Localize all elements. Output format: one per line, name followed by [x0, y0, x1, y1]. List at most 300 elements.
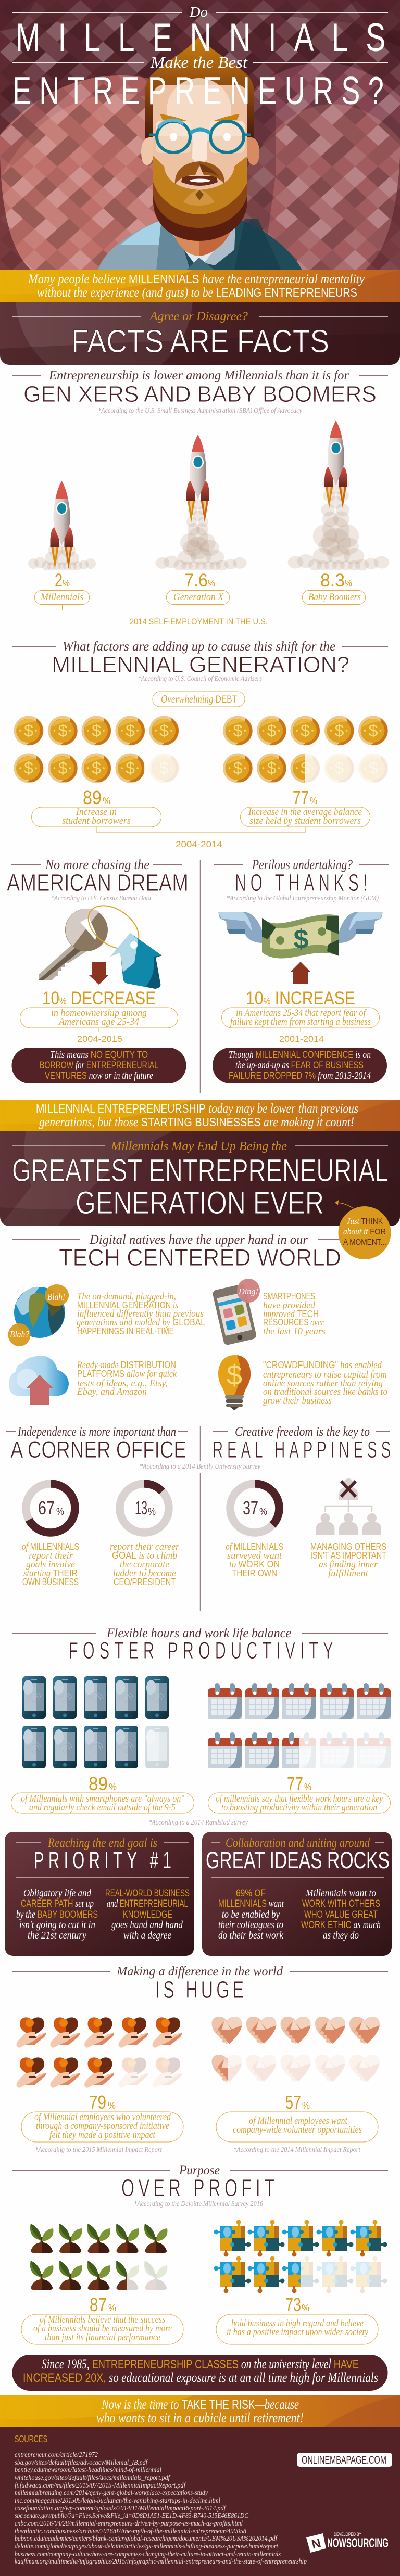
text: life and career path: Obligatory life and: [23, 1888, 92, 1899]
rocket: generation x: %: [208, 578, 215, 589]
stat: 79 percent: felt they made a positive impact: [49, 2129, 156, 2140]
text: global happenings: [77, 1291, 205, 1336]
icon: globe with speech bubbles: [8, 1284, 69, 1346]
coins: student borrowers: $: [126, 759, 135, 777]
coins: student borrowers: $: [58, 759, 68, 777]
heading: No more chasing the: [45, 857, 149, 872]
text: life and career path: by the BABY BOOMERS: [16, 1909, 98, 1920]
heading: Reaching the end goal is: [47, 1836, 157, 1850]
logo: nowsourcing: DEVELOPED BY: [334, 2532, 361, 2537]
text: [110, 1541, 180, 1587]
stat: always on: %: [109, 1782, 117, 1792]
text: global happenings: The on-demand, plugged-in,: [77, 1291, 176, 1302]
panel: greatest entrepreneurial generation: [0, 1131, 400, 1226]
title: [12, 4, 388, 112]
coins: average balance: $: [301, 759, 310, 777]
item: globe: [8, 1284, 205, 1346]
coins: average balance: $: [267, 759, 277, 777]
stat: 37 percent donut: %: [259, 1507, 267, 1517]
heading: millennial generation: [12, 640, 388, 683]
sources list: theatlantic.com/business/archive/2016/07/the-myth-of-the-millennial-entrepreneur/490058: [15, 2528, 246, 2535]
text: distribution platforms: PLATFORMS allow for quick: [77, 1369, 177, 1380]
callout: millennial confidence: [213, 1048, 387, 1083]
icons: plants 87 percent: [30, 2224, 167, 2290]
icon: smartphone with speech bubble: Ding!: [238, 1286, 258, 1296]
sources list: whitehouse.gov/sites/default/files/docs/millennials_report.pdf: [15, 2474, 171, 2482]
heading: FACTS ARE FACTS: [71, 324, 329, 360]
icons: smartphones 89 percent: [22, 1676, 169, 1768]
text: global happenings: generations and molded by GLOBAL: [77, 1317, 205, 1328]
stat: 77 percent: Increase in the average balance: [248, 807, 362, 818]
stat: 87 percent: than just its financial performance: [45, 2332, 160, 2343]
stat: 57 percent: *According to the 2014 Millennial Impact Report: [233, 2146, 361, 2154]
stat: 10 percent increase: 10% INCREASE: [246, 988, 355, 1009]
source: randstad: *According to a 2014 Randstad survey: [148, 1819, 248, 1827]
heading: is huge: [12, 1965, 388, 2003]
heading: gen xers and baby boomers: *According to the U.S. Small Business Administration (SBA) Office of Advocacy: [98, 407, 303, 415]
item: crowdfunding: [218, 1355, 388, 1410]
icons: calendars 77 percent: [208, 1683, 391, 1768]
stat: flexible hours: 77: [287, 1773, 303, 1794]
heading: NO THANKS!: [235, 870, 367, 897]
stat: 79 percent: 79: [89, 2092, 106, 2113]
callout: just think about it: [335, 1200, 391, 1259]
sources list: inc.com/magazine/201505/leigh-buchanan/the-vanishing-startups-in-decline.html: [15, 2497, 220, 2505]
text: crowdfunding: [263, 1360, 388, 1406]
sources list: casefoundation.org/wp-content/uploads/2014/11/MillennialImpactReport-2014.pdf: [15, 2505, 227, 2513]
rocket: millennials: 2: [55, 570, 63, 591]
soul patch: [195, 190, 204, 200]
icon: cloud upload: [9, 1356, 69, 1405]
text: report their: [29, 1550, 73, 1561]
heading: a corner office: A CORNER OFFICE: [10, 1436, 186, 1463]
stat: 10 percent decrease: 2004-2015: [77, 1034, 122, 1044]
stat: always on: and regularly check email outside of the 9-5: [29, 1802, 176, 1813]
coins: student borrowers: $: [24, 721, 33, 740]
stat: 13 percent donut: %: [148, 1507, 156, 1517]
heading: real happiness: Creative freedom is the key to: [235, 1425, 370, 1439]
stat: 67 percent donut: 67: [38, 1497, 55, 1519]
footer: [0, 2427, 400, 2576]
coins: average balance: $: [335, 721, 344, 740]
callout: entrepreneurship classes: [12, 2355, 388, 2391]
heading: Perilous undertaking?: [252, 857, 353, 872]
coins: student borrowers: $: [58, 721, 68, 740]
coins: average balance: $: [369, 759, 378, 777]
icon: winged money: [218, 912, 383, 959]
stat: 89 percent: Increase in: [76, 807, 117, 818]
heading: millennial generation: *According to U.S. Council of Economic Advisers: [138, 675, 262, 683]
stat: 87 percent: of a business should be measured by more: [33, 2323, 172, 2334]
stat: 79 percent: %: [108, 2100, 116, 2111]
stat: 87 percent: [21, 2294, 183, 2344]
intro banner: [0, 270, 400, 302]
stat: 89 percent: student borrowers: [62, 816, 131, 826]
stat: 67 percent donut: [22, 1484, 79, 1587]
panel: facts are facts: [0, 302, 400, 365]
coins: student borrowers: $: [126, 721, 135, 740]
text: report their career: [110, 1541, 180, 1552]
text: smartphones resources: have provided: [263, 1300, 315, 1311]
sources list: entrepreneur.com/article/271972: [15, 2451, 98, 2459]
heading: tech centered world: Digital natives have the upper hand in our: [89, 1233, 308, 1247]
coins: average balance: $: [233, 721, 243, 740]
text: 69 percent: to be enabled by: [222, 1909, 280, 1920]
heading: real happiness: REAL HAPPINESS: [213, 1436, 391, 1463]
rocket: baby boomers: Baby Boomers: [308, 592, 361, 603]
banner: making it count: MILLENNIAL ENTREPRENEURSHIP today may be lower than previous: [36, 1102, 358, 1116]
icon: winged money: $: [294, 924, 309, 954]
text: work with others: WHO VALUE GREAT: [304, 1909, 378, 1920]
stat: 89 percent: %: [103, 796, 110, 806]
stat: 57 percent: company-wide volunteer opportunities: [233, 2124, 362, 2135]
stat: always on: of Millennials with smartphones are "always on": [21, 1793, 185, 1804]
heading: [7, 857, 189, 902]
text: starting THEIR: [23, 1568, 78, 1579]
heading: [214, 857, 389, 902]
panel: no thanks: [213, 857, 389, 1083]
icons: puzzles 73 percent: [214, 2220, 388, 2293]
text: 69 percent: 69% OF: [236, 1888, 266, 1899]
org chart: managing others: [310, 1478, 386, 1579]
heading: gen xers and baby boomers: Entrepreneurship is lower among Millennials than it is for: [48, 368, 349, 382]
text: life and career path: [16, 1888, 98, 1941]
title: Entrepreneurs: ENTREPRENEURS?: [12, 69, 384, 112]
text: real-world business: goes hand and hand: [111, 1919, 183, 1931]
sources list: sbc.senate.gov/public/?a=Files.Serve&File_id=0D8D1A51-EE1D-4F83-B740-515E46E861DC: [15, 2512, 249, 2520]
item: distribution platforms: [9, 1356, 177, 1405]
date range connector: [97, 827, 305, 849]
text: work with others: WORK ETHIC as much: [301, 1919, 381, 1931]
sources list: kauffman.org/multimedia/infographics/2015/infographic-millennial-entrepreneurs-and-the-state-of-entrepreneurship: [15, 2558, 307, 2566]
coins: student borrowers: $: [24, 759, 33, 777]
date range connector: 2004-2014: [176, 839, 222, 849]
callout: no equity: VENTURES now or in the future: [45, 1070, 153, 1081]
heading: a corner office: [6, 1425, 188, 1463]
coins: average balance: $: [233, 759, 243, 777]
callout: millennial confidence: the up-and-up as FEAR OF BUSINESS: [235, 1060, 364, 1071]
rocket: millennials: %: [63, 578, 70, 589]
icon: key and house tag: [39, 897, 162, 989]
stat: 10 percent decrease: 10% DECREASE: [42, 988, 156, 1009]
stat: 79 percent: through a company-sponsored initiative: [36, 2121, 169, 2132]
text: THEIR OWN: [232, 1568, 277, 1578]
text: real-world business: KNOWLEDGE: [123, 1909, 172, 1920]
beard: [153, 156, 247, 241]
text: work with others: as they do: [323, 1930, 359, 1941]
intro banner: Many people believe MILLENNIALS have the entrepreneurial mentality: [28, 272, 365, 286]
sources list: millennialbranding.com/2014/geny-genz-global-workplace-expectations-study: [15, 2489, 208, 2497]
text: to WORK ON: [229, 1559, 280, 1570]
coins: student borrowers: $: [126, 759, 135, 777]
heading: gen xers and baby boomers: GEN XERS AND BABY BOOMERS: [23, 381, 377, 407]
stat: always on: [11, 1773, 194, 1813]
heading: over profit: *According to the Deloitte Millennial Survey 2016: [134, 2200, 263, 2208]
item: smartphones: [212, 1279, 326, 1346]
sources list: bentley.edu/newsroom/latest-headlines/mind-of-millennial: [15, 2466, 161, 2474]
stat: 89 percent: [31, 787, 161, 827]
chart caption: 2014 SELF-EMPLOYMENT IN THE U.S.: [130, 617, 268, 627]
icons: handshake hearts 57 percent: [211, 2017, 380, 2082]
coins: average balance: $: [335, 759, 344, 777]
text: CEO/PRESIDENT: [114, 1577, 176, 1587]
callout: no equity: This means NO EQUITY TO: [50, 1049, 148, 1061]
mouth and moustache: [175, 161, 224, 186]
stat: 73 percent: hold business in high regard and believe: [231, 2318, 364, 2329]
coins: average balance: $: [369, 721, 378, 740]
coins: average balance: $: [301, 759, 310, 777]
stat: 57 percent: [216, 2092, 378, 2154]
text: smartphones resources: SMARTPHONES: [263, 1291, 315, 1302]
text: crowdfunding: on traditional sources like banks to: [263, 1386, 388, 1397]
heading: tech centered world: [12, 1233, 341, 1271]
stat: 79 percent: [21, 2092, 183, 2154]
heading: gen xers and baby boomers: [12, 368, 388, 415]
text: life and career path: the 21st century: [28, 1930, 86, 1941]
coins: average balance: $: [267, 721, 277, 740]
panel: greatest entrepreneurial generation: GENERATION EVER: [76, 1185, 324, 1220]
text: work with others: Millennials want to: [305, 1888, 376, 1899]
sources list: [15, 2451, 307, 2566]
rocket: generation x: 7.6: [184, 570, 208, 591]
intro banner: without the experience (and guts) to be LEADING ENTREPRENEURS: [37, 286, 357, 300]
stat: 10 percent increase: 2001-2014: [279, 1034, 324, 1044]
icon: globe with speech bubbles: Blah?: [10, 1329, 29, 1340]
nose: [192, 130, 207, 163]
arrow: down: [89, 962, 109, 985]
callout: just think about it: A MOMENT...: [343, 1238, 386, 1247]
text: fulfillment: [328, 1568, 369, 1579]
coins: student borrowers: $: [159, 721, 169, 740]
heading: a corner office: Independence is more important than: [17, 1425, 176, 1439]
stat: 10 percent decrease: [20, 988, 178, 1044]
banner: making it count: generations, but those STARTING BUSINESSES are making it count!: [39, 1115, 354, 1129]
text: smartphones resources: RESOURCES over: [263, 1317, 324, 1328]
icon: globe with speech bubbles: Blah!: [47, 1292, 65, 1302]
stat: 57 percent: %: [302, 2100, 310, 2111]
stat: 10 percent increase: failure kept them from starting a business: [230, 1016, 371, 1027]
text: [310, 1541, 386, 1579]
stat: always on: 89: [89, 1773, 108, 1794]
text: distribution platforms: Ready-made DISTRIBUTION: [77, 1360, 176, 1371]
text: global happenings: HAPPENINGS IN REAL-TIME: [77, 1326, 174, 1336]
stat: flexible hours: [208, 1773, 391, 1813]
text: distribution platforms: Ebay, and Amazon: [77, 1386, 147, 1397]
panel: priority 1: [5, 1832, 194, 1956]
stat: flexible hours: %: [304, 1782, 311, 1792]
text: 69 percent: [218, 1888, 284, 1941]
heading: [206, 1836, 390, 1877]
text: global happenings: MILLENNIAL GENERATION is: [77, 1300, 178, 1311]
heading: foster productivity: Flexible hours and work life balance: [106, 1626, 291, 1640]
heading: *According to the Global Entrepreneurship Monitor (GEM): [227, 895, 379, 902]
stat: 77 percent: [241, 787, 370, 827]
sources list: deloitte.com/global/en/pages/about-deloitte/articles/gx-millennials-shifting-business-purpose.html#report: [15, 2543, 279, 2551]
label: overwhelming debt: Overwhelming DEBT: [161, 693, 237, 705]
heading: PRIORITY #1: [34, 1848, 171, 1874]
text: crowdfunding: entrepreneurs to raise capital from: [263, 1369, 387, 1380]
heading: foster productivity: FOSTER PRODUCTIVITY: [69, 1638, 333, 1664]
text: of MILLENNIALS: [22, 1541, 79, 1552]
stat: 10 percent increase: in Americans 25-34 that report fear of: [236, 1008, 367, 1018]
logo: nowsourcing: N: [310, 2536, 322, 2552]
hair: [145, 36, 254, 138]
text: crowdfunding: online sources rather than relying: [263, 1378, 383, 1389]
stat: 77 percent: %: [310, 796, 317, 806]
rocket: baby boomers: 8.3: [320, 570, 345, 591]
stat: 10 percent decrease: in homeownership among: [51, 1008, 147, 1018]
text: [22, 1541, 79, 1587]
connector: [63, 604, 334, 615]
sources list: fi.fudwaca.com/mi/files/2015/07/2015-MillennialImpactReport.pdf: [15, 2482, 186, 2490]
callout: just think about it: about it FOR: [343, 1227, 386, 1236]
heading: real happiness: [213, 1425, 391, 1463]
text: 69 percent: MILLENNIALS want: [218, 1898, 284, 1909]
collar and neck: [173, 228, 235, 270]
agree or disagree: Agree or Disagree?: [149, 310, 248, 323]
sweater: [98, 219, 302, 270]
banner: making it count: [0, 1100, 400, 1131]
title: Millennials: MILLENNIALS: [16, 16, 385, 60]
text: OWN BUSINESS: [22, 1577, 79, 1587]
stat: 37 percent donut: [226, 1484, 283, 1578]
figure shadow: [242, 85, 276, 234]
text: real-world business: and ENTREPRENEURIAL: [107, 1898, 188, 1909]
panel: great ideas rocks: [202, 1832, 392, 1956]
text: smartphones resources: [263, 1291, 326, 1337]
heading: [16, 1836, 189, 1877]
sources list: sba.gov/sites/default/files/advocacy/Millenial_IB.pdf: [15, 2459, 148, 2467]
subheading: Millennials May End Up Being the: [110, 1140, 287, 1153]
stat: 87 percent: 87: [90, 2294, 107, 2315]
rocket: millennials: Millennials: [40, 592, 83, 603]
callout: entrepreneurship classes: Since 1985, ENTREPRENEURSHIP CLASSES on the university level HAVE: [42, 2356, 359, 2371]
heading: millennial generation: MILLENNIAL GENERATION?: [52, 652, 349, 678]
coins: student borrowers: $: [92, 721, 101, 740]
heading: over profit: [12, 2163, 388, 2208]
logo: nowsourcing: [306, 2532, 389, 2553]
text: surveyed want: [227, 1550, 282, 1561]
wings: [218, 912, 383, 943]
stat: 10 percent increase: [222, 988, 379, 1044]
glasses: [149, 120, 251, 153]
rocket: baby boomers: [288, 420, 390, 605]
face: [153, 85, 247, 199]
sources list: cnbc.com/2016/04/28/millennial-entrepreneurs-driven-by-purpose-as-much-as-profits.html: [15, 2520, 243, 2528]
text: crowdfunding: grow their business: [263, 1395, 332, 1406]
stat: 87 percent: of Millennials believe that the success: [40, 2314, 165, 2325]
text: real-world business: REAL-WORLD BUSINESS: [105, 1888, 190, 1899]
text: of MILLENNIALS: [226, 1541, 283, 1552]
stat: 77 percent: 77: [293, 787, 309, 808]
stat: 73 percent: [216, 2294, 378, 2344]
heading: *According to U.S. Census Bureau Data: [51, 895, 151, 902]
icon: smartphone with speech bubble: [212, 1279, 260, 1346]
text: distribution platforms: [77, 1360, 177, 1397]
text: goals involve: [26, 1559, 75, 1570]
heading: tech centered world: TECH CENTERED WORLD: [59, 1244, 341, 1271]
rocket: millennials: [28, 481, 96, 605]
sources list: business.com/company-culture/how-are-companies-changing-their-culture-to-attract-and-retain-millennials: [15, 2551, 281, 2558]
text: ladder to become: [113, 1568, 176, 1579]
illustrated man: [98, 36, 302, 270]
banner: take the risk: [0, 2395, 400, 2427]
coins: average balance: [223, 716, 388, 783]
sources list: babson.edu/academics/centers/blank-center/global-research/gem/documents/GEM%20USA%202014.pdf: [15, 2535, 278, 2543]
rocket: baby boomers: %: [345, 578, 352, 589]
stat: 67 percent donut: %: [56, 1507, 64, 1517]
text: as finding inner: [319, 1559, 378, 1570]
stat: 73 percent: it has a positive impact upon wider society: [227, 2327, 368, 2338]
banner: take the risk: who wants to sit in a cubicle until retirement!: [96, 2410, 304, 2426]
heading: Collaboration and uniting around: [226, 1836, 370, 1850]
stat: 10 percent decrease: Americans age 25-34: [58, 1016, 139, 1027]
stat: 77 percent: size held by student borrowers: [249, 816, 361, 826]
stat: 57 percent: 57: [285, 2092, 301, 2113]
icon: lightbulb: $: [227, 1360, 242, 1391]
stat: 87 percent: %: [108, 2303, 116, 2313]
eyebrows: [160, 114, 240, 121]
arrow: up: [291, 962, 310, 984]
chart: rockets self-employment: [28, 420, 390, 627]
callout: millennial confidence: FAILURE DROPPED 7% from 2013-2014: [229, 1070, 371, 1081]
text: smartphones resources: the last 10 years: [263, 1326, 326, 1337]
coins: student borrowers: [14, 716, 179, 783]
source: bentley survey: *According to a 2014 Bently University Survey: [140, 1463, 261, 1471]
icon: lightbulb: [218, 1355, 251, 1410]
stat: 37 percent donut: 37: [243, 1497, 258, 1519]
ears: [141, 137, 259, 165]
callout: no equity: BORROW for ENTREPRENEURIAL: [40, 1060, 158, 1071]
text: distribution platforms: tests of ideas, e.g., Etsy,: [77, 1378, 168, 1389]
rocket: generation x: Generation X: [173, 592, 224, 603]
panel: american dream: [7, 857, 189, 1083]
banner: take the risk: Now is the time to TAKE THE RISK—because: [101, 2396, 299, 2412]
heading: is huge: Making a difference in the world: [116, 1965, 283, 1979]
icon: crossed out manager: [316, 1478, 381, 1535]
heading: foster productivity: [12, 1626, 388, 1664]
callout: just think about it: Just THINK: [347, 1216, 383, 1226]
stat: 79 percent: of Millennial employees who volunteered: [34, 2112, 171, 2123]
text: life and career path: CAREER PATH set up: [21, 1898, 94, 1909]
stat: 57 percent: of Millennial employees want: [249, 2115, 348, 2126]
text: global happenings: influenced differently than previous: [77, 1308, 204, 1319]
bill: [262, 914, 339, 959]
text: [226, 1541, 283, 1578]
stat: 13 percent donut: [110, 1484, 180, 1587]
text: GOAL is to climb: [112, 1550, 177, 1561]
sources heading: SOURCES: [15, 2434, 47, 2444]
text: crowdfunding: "CROWDFUNDING" has enabled: [263, 1360, 382, 1371]
callout: no equity: [11, 1048, 186, 1083]
stat: 13 percent donut: 13: [135, 1497, 147, 1519]
text: 69 percent: do their best work: [218, 1930, 284, 1941]
callout: millennial confidence: Though MILLENNIAL CONFIDENCE is on: [229, 1049, 371, 1061]
stat: 79 percent: *According to the 2015 Millennial Impact Report: [35, 2146, 162, 2154]
text: real-world business: [105, 1888, 190, 1941]
text: work with others: [301, 1888, 381, 1941]
coins: student borrowers: $: [92, 759, 101, 777]
hero illustration: [0, 0, 400, 270]
text: smartphones resources: improved TECH: [263, 1309, 319, 1320]
heading: AMERICAN DREAM: [7, 869, 189, 896]
icons: hearts in hands 79 percent: [16, 2017, 182, 2088]
text: real-world business: with a degree: [123, 1930, 171, 1941]
heading: is huge: IS HUGE: [155, 1976, 244, 2003]
text: the corporate: [120, 1559, 169, 1570]
heading: over profit: OVER PROFIT: [121, 2175, 274, 2201]
rocket: generation x: [155, 435, 247, 605]
